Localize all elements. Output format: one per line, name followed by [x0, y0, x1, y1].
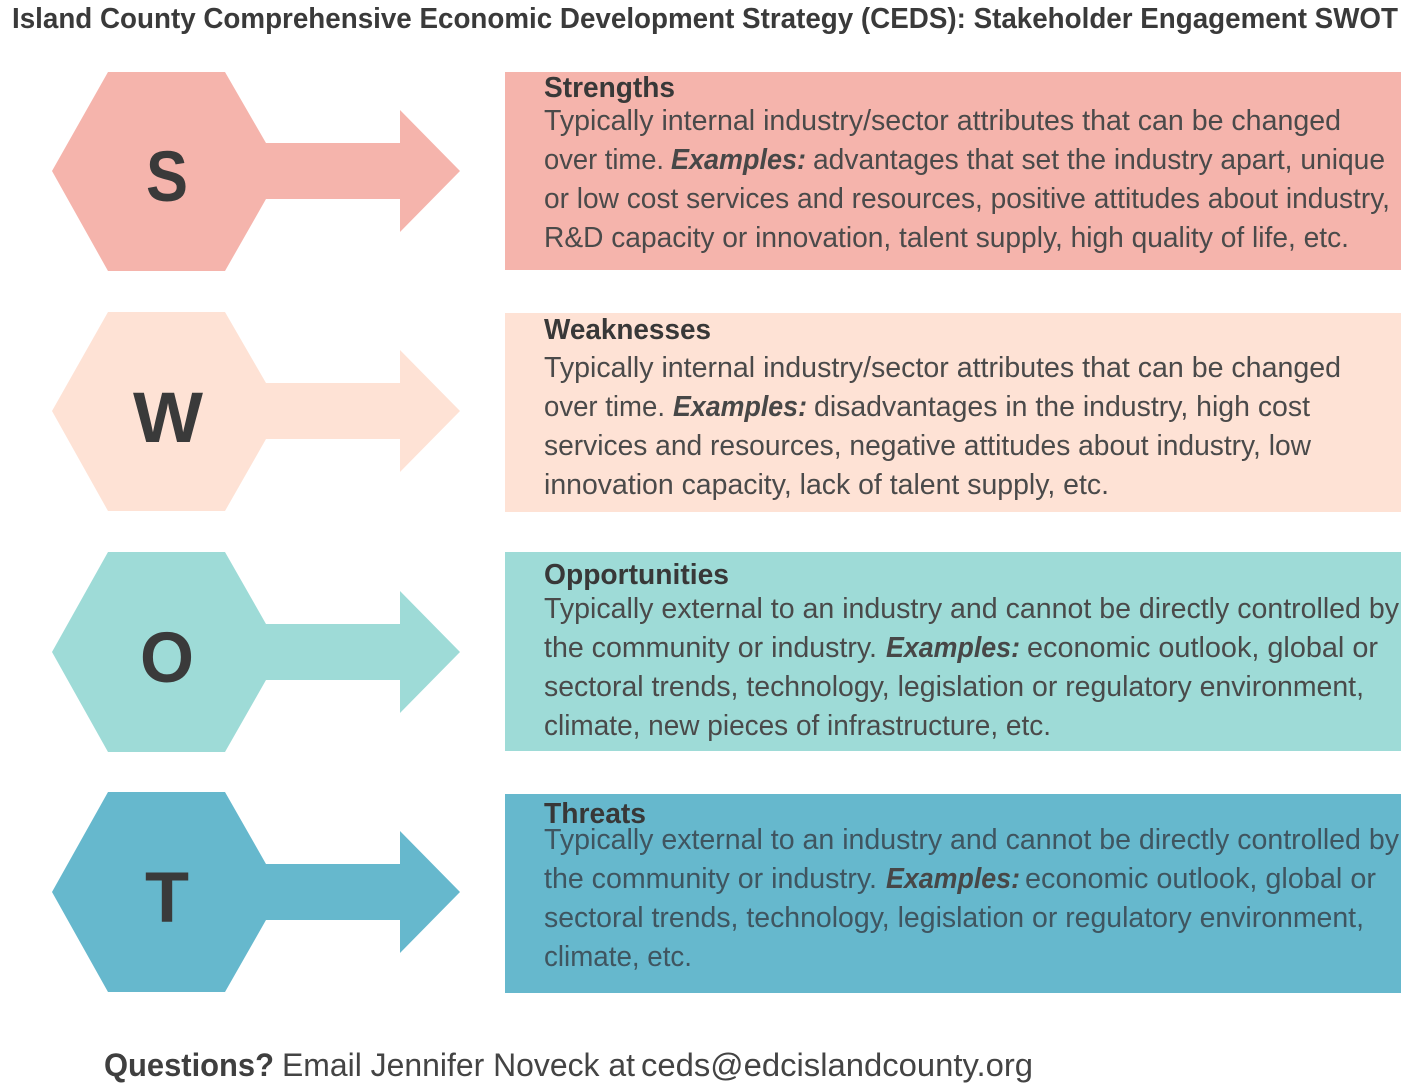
heading: opportunities: Opportunities — [544, 559, 729, 591]
W hexagon arrow — [52, 312, 460, 511]
text: threats description: sectoral trends, technology, legislation or regulatory environment, — [544, 902, 1364, 934]
text: weaknesses description: Typically internal industry/sector attributes that can be changed — [544, 352, 1341, 384]
heading: threats: Threats — [544, 798, 646, 830]
text: strengths description — [544, 105, 1390, 254]
text: opportunities description: the community or industry. — [544, 632, 877, 664]
panel: strengths — [505, 72, 1401, 270]
text: threats description: the community or industry. — [544, 863, 877, 895]
T hexagon arrow — [52, 792, 460, 992]
text: opportunities description: Typically external to an industry and cannot be directly controlled by — [544, 593, 1400, 625]
panel: opportunities — [505, 552, 1401, 751]
text: threats description — [544, 824, 1400, 973]
letter O: O — [140, 619, 194, 698]
text: weaknesses description: services and resources, negative attitudes about industry, low — [544, 430, 1311, 462]
S hexagon arrow — [52, 72, 460, 271]
text: strengths description: or low cost services and resources, positive attitudes about industry, — [544, 183, 1390, 215]
heading: strengths: Strengths — [544, 72, 675, 104]
text: weaknesses description — [544, 352, 1341, 501]
panel: threats — [505, 794, 1401, 993]
title: Island County Comprehensive Economic Development Strategy (CEDS): Stakeholder Engagement SWOT — [12, 3, 1399, 35]
text: weaknesses description: innovation capacity, lack of talent supply, etc. — [544, 469, 1109, 501]
letter T: T — [145, 859, 189, 938]
text: opportunities description: sectoral trends, technology, legislation or regulatory environment, — [544, 671, 1364, 703]
text: threats description: Typically external to an industry and cannot be directly controlled by — [544, 824, 1400, 856]
text: strengths description: Typically internal industry/sector attributes that can be changed — [544, 105, 1341, 137]
heading: weaknesses: Weaknesses — [544, 314, 711, 346]
text: weaknesses description: Examples: — [673, 391, 807, 423]
text: strengths description: Examples: — [671, 144, 806, 176]
text: weaknesses description: over time. — [544, 391, 665, 423]
text: strengths description: advantages that set the industry apart, unique — [813, 144, 1385, 176]
text: opportunities description: Examples: — [886, 632, 1020, 664]
text: opportunities description: climate, new pieces of infrastructure, etc. — [544, 710, 1051, 742]
footer contact line: Email Jennifer Noveck at — [282, 1047, 635, 1083]
footer contact line: Questions? — [104, 1047, 274, 1083]
footer contact line: ceds@edcislandcounty.org — [641, 1047, 1033, 1083]
panel: weaknesses — [505, 313, 1401, 512]
text: threats description: Examples: — [886, 863, 1020, 895]
text: weaknesses description: disadvantages in the industry, high cost — [814, 391, 1310, 423]
text: opportunities description: economic outlook, global or — [1027, 632, 1379, 664]
footer contact line — [104, 1047, 1033, 1083]
letter W: W — [133, 379, 203, 458]
text: threats description: climate, etc. — [544, 941, 692, 973]
letter S: S — [146, 138, 188, 217]
text: threats description: economic outlook, global or — [1025, 863, 1377, 895]
text: opportunities description — [544, 593, 1400, 742]
O hexagon arrow — [52, 552, 460, 752]
text: strengths description: over time. — [544, 144, 664, 176]
text: strengths description: R&D capacity or innovation, talent supply, high quality of life, etc. — [544, 222, 1349, 254]
